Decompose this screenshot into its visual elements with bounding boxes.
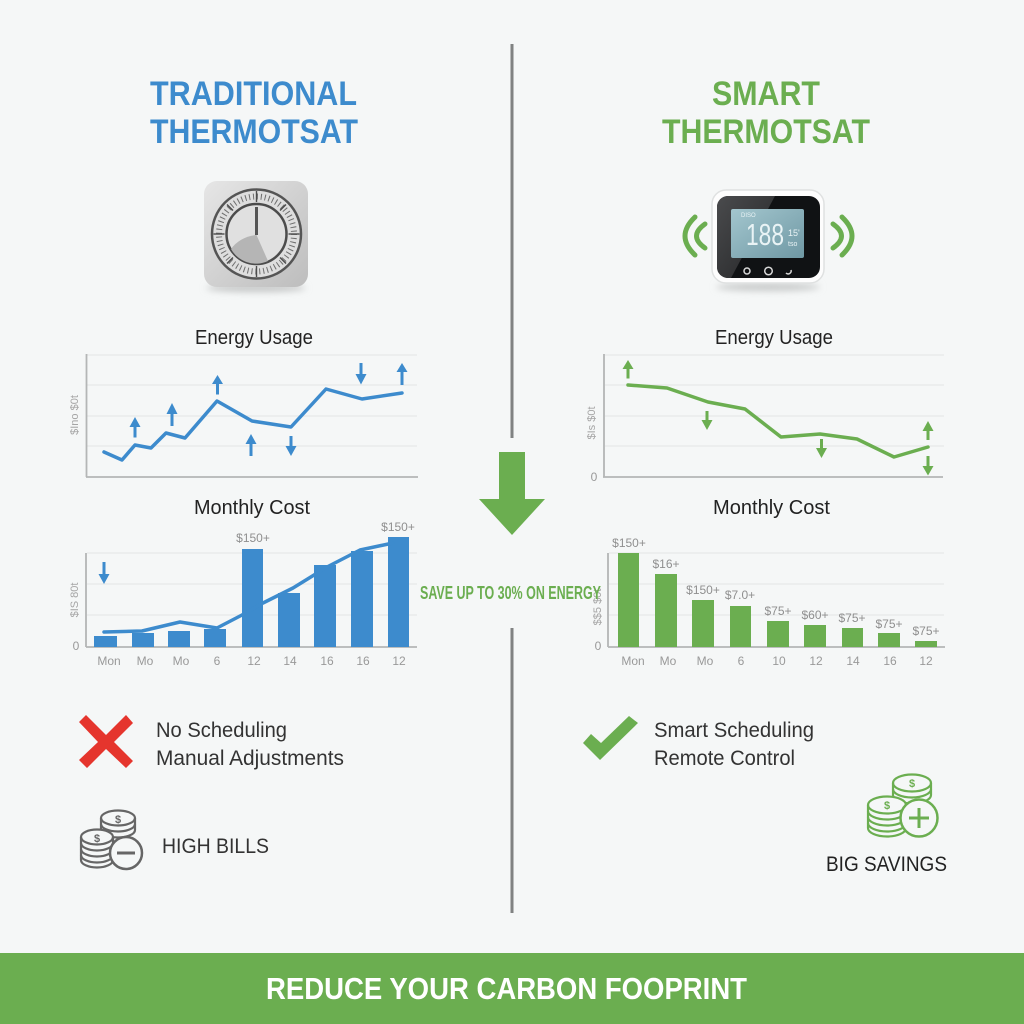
line chart: traditional energy usage [69,354,418,477]
icon: coins with plus: $ [884,800,890,812]
title: traditional thermostat [150,75,358,151]
bar chart: smart monthly cost: Mon [621,654,645,668]
bar chart: smart monthly cost: Mo [660,654,677,668]
icon: smart thermostat device [712,190,824,291]
bar chart: traditional monthly cost: $150+ [381,520,415,534]
icon: coins with minus: $ [94,833,100,845]
bar chart: traditional monthly cost: Mo [137,654,154,668]
footer banner: REDUCE YOUR CARBON FOOPRINT [266,971,747,1006]
title: traditional thermostat: TRADITIONAL [150,75,357,113]
bar chart: traditional monthly cost: Mo [173,654,190,668]
icon: coins with minus [81,810,142,869]
arrows: energy markers [130,363,408,456]
arrow: big down arrow [479,452,545,535]
arrows: energy markers [622,360,934,476]
heading: energy usage (smart): Energy Usage [715,327,833,349]
icon: coins with minus: $ [115,814,121,826]
icon: smart thermostat device: 188 [746,217,784,252]
bar chart: smart monthly cost [592,536,945,668]
bar chart: smart monthly cost: $150+ [612,536,646,550]
bar chart: traditional monthly cost: 0 [73,639,80,653]
icon: red cross [79,715,133,768]
bar chart: smart monthly cost: $150+ [686,583,720,597]
label: high bills: HIGH BILLS [162,835,269,858]
bar chart: smart monthly cost: 6 [738,654,745,668]
title: smart thermostat [662,75,870,151]
bar chart: smart monthly cost: 14 [846,654,860,668]
line chart: smart energy usage [586,354,944,484]
heading: energy usage (traditional): Energy Usage [195,327,313,349]
bar chart: traditional monthly cost: $150+ [236,531,270,545]
icon: coins with plus [868,774,938,836]
text block: traditional features [156,719,344,770]
bar chart: traditional monthly cost: 14 [283,654,297,668]
title: smart thermostat: SMART [712,75,820,113]
bar chart: traditional monthly cost: 16 [320,654,334,668]
text block: smart features: Remote Control [654,747,795,770]
bar chart: smart monthly cost: Mo [697,654,714,668]
icon: smart thermostat device: 15' [788,228,800,238]
bar chart: smart monthly cost: $75+ [912,624,940,638]
text block: smart features [654,719,814,770]
bar chart: smart monthly cost: $75+ [838,611,866,625]
title: traditional thermostat: THERMOTSAT [150,113,358,151]
bar chart: smart monthly cost: 10 [772,654,786,668]
bar chart: smart monthly cost: $60+ [801,608,829,622]
icon: smart thermostat device: tso [788,241,797,248]
bar chart: smart monthly cost: $75+ [764,604,792,618]
bar chart: smart monthly cost: $$5 $0t [592,589,604,625]
icon: wireless waves [685,217,852,255]
bar chart: smart monthly cost: 12 [919,654,933,668]
bar chart: traditional monthly cost [69,520,417,668]
icon: coins with plus: $ [909,778,915,790]
bar chart: traditional monthly cost: 12 [392,654,406,668]
text block: traditional features: Manual Adjustments [156,747,344,770]
title: smart thermostat: THERMOTSAT [662,113,870,151]
icon: smart thermostat device: DISO [741,213,756,219]
footer banner [0,953,1024,1024]
icon: analog dial thermostat [204,181,308,292]
center divider [510,44,514,913]
bar chart: traditional monthly cost: Mon [97,654,121,668]
text block: traditional features: No Scheduling [156,719,287,742]
bar chart: traditional monthly cost: $IS 80t [69,583,81,617]
bar chart: smart monthly cost: 16 [883,654,897,668]
line chart: smart energy usage: $Is $0t [586,406,598,440]
line chart: traditional energy usage: $Ino $0t [69,395,81,435]
icon: check mark [583,716,638,760]
text block: smart features: Smart Scheduling [654,719,814,742]
heading: monthly cost (smart): Monthly Cost [713,497,830,519]
label: big savings: BIG SAVINGS [826,853,947,876]
bar chart: traditional monthly cost: 6 [214,654,221,668]
bar chart: traditional monthly cost: 12 [247,654,261,668]
bar chart: traditional monthly cost: 16 [356,654,370,668]
bar chart: smart monthly cost: $7.0+ [725,588,755,602]
bar chart: smart monthly cost: $16+ [652,557,680,571]
bar chart: smart monthly cost: 12 [809,654,823,668]
line chart: smart energy usage: 0 [591,470,598,484]
bar chart: smart monthly cost: 0 [595,639,602,653]
callout: savings text: SAVE UP TO 30% ON ENERGY [420,583,601,603]
bar chart: smart monthly cost: $75+ [875,617,903,631]
heading: monthly cost (traditional): Monthly Cost [194,497,310,519]
